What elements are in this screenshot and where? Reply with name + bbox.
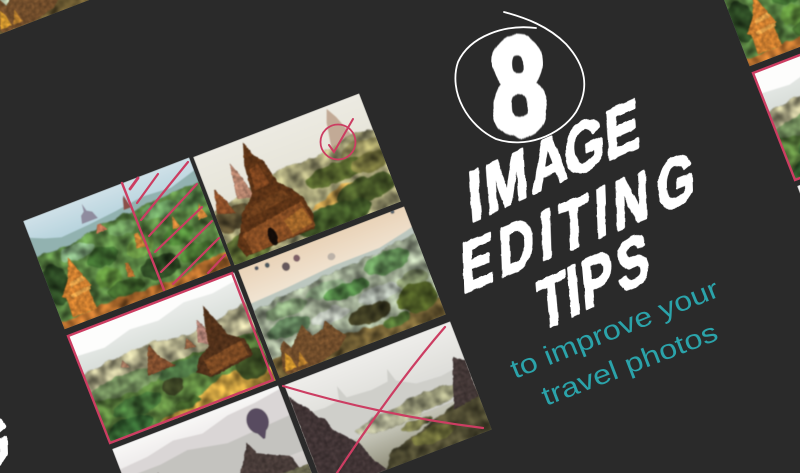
photo: balloons over misty valley [232, 203, 453, 386]
heading line: EDITING: EDITING [460, 137, 696, 308]
photo collage: six edited Bagan landscape photos [17, 91, 499, 473]
crop frame around third photo [68, 273, 273, 443]
subtitle [506, 274, 723, 412]
photo: temples with pink crop frame [62, 270, 283, 452]
photo: green valley with orange pagodas [17, 155, 238, 337]
icon: check mark in circle [320, 119, 356, 160]
right edge: next slide of the same collage [702, 0, 800, 294]
heading line: IMAGE: IMAGE [466, 84, 641, 237]
hand-drawn circle around number [455, 12, 584, 142]
cross over last photo [283, 327, 483, 473]
number 8: 8 [488, 9, 549, 162]
hatching over left half of first photo [122, 162, 225, 290]
remnant of neighbouring slide title, bottom left [0, 272, 11, 473]
photo: hazy temple silhouettes with pink cross [284, 319, 499, 473]
heading line: TIPS: TIPS [535, 218, 652, 346]
title block: 8 image editing tips [455, 9, 696, 346]
pink markups on collage photos [68, 119, 483, 473]
photo strip: cropped neighbouring slide, top left [0, 0, 168, 44]
subtitle line two: travel photos [537, 317, 722, 412]
photo: pale hazy valley with balloon [112, 385, 320, 473]
photo: large temple at sunset [193, 93, 401, 266]
subtitle line one: to improve your [506, 274, 723, 385]
